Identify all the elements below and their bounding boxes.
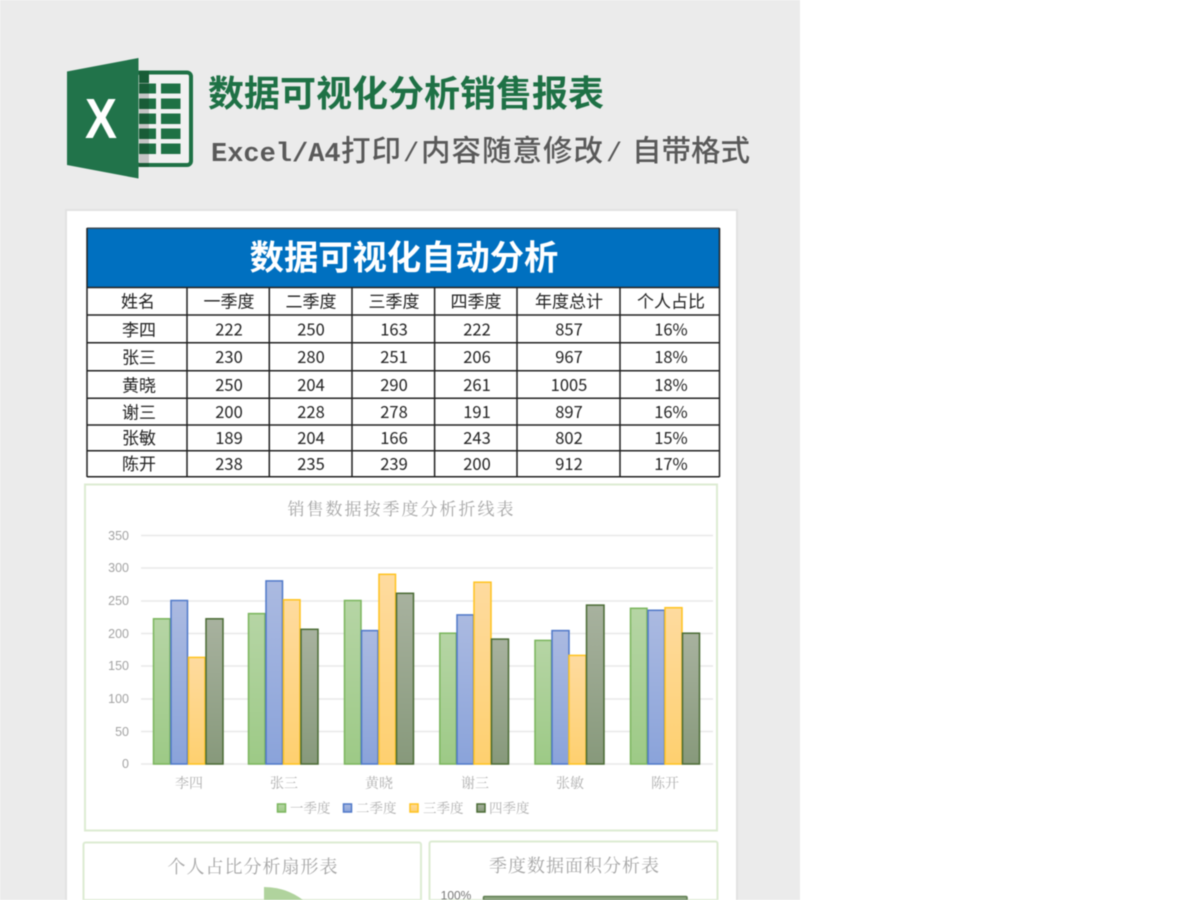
table banner <box>87 228 720 288</box>
sales data table: 228 <box>297 399 325 423</box>
sales data table: 857 <box>555 316 583 340</box>
sales data table: 239 <box>380 451 408 475</box>
sales data table: 200 <box>463 451 491 475</box>
y axis labels: 50 <box>115 725 129 739</box>
sales data table: 290 <box>380 372 408 396</box>
sales data table: 912 <box>555 451 583 475</box>
panel: area chart <box>430 842 718 900</box>
sales data table: 黄晓 <box>122 372 156 396</box>
sales data table: 18% <box>654 344 688 368</box>
sales data table: 李四 <box>122 316 156 341</box>
sales data table: 802 <box>555 425 583 449</box>
chart title: 销售数据按季度分析折线表 <box>288 500 516 519</box>
x axis labels: 张敏 <box>556 773 584 793</box>
subtitle: / <box>403 140 419 170</box>
sales data table: 三季度 <box>368 288 420 312</box>
bars: 李四 <box>154 600 223 764</box>
sales data table: 250 <box>215 372 243 396</box>
legend: 一季度 <box>290 797 331 817</box>
sales data table: 189 <box>215 425 243 449</box>
bars: 黄晓 <box>344 574 414 764</box>
sales data table: 238 <box>215 451 243 475</box>
icon: Excel logo <box>67 58 191 178</box>
legend: 三季度 <box>423 797 464 817</box>
sales data table: 1005 <box>551 372 587 396</box>
sales data table: 204 <box>297 372 325 396</box>
sales data table: 250 <box>297 316 325 340</box>
sales data table: 897 <box>555 399 583 423</box>
legend: 二季度 <box>356 797 397 817</box>
legend: 四季度 <box>489 797 530 817</box>
sales data table: 235 <box>297 451 325 475</box>
x axis labels <box>175 773 679 793</box>
area band <box>484 896 687 900</box>
sales data table: 222 <box>215 316 243 340</box>
pie chart title: 个人占比分析扇形表 <box>168 857 338 877</box>
y axis labels: 200 <box>108 627 129 641</box>
bars: 张三 <box>248 581 318 764</box>
sales data table: 166 <box>380 425 408 449</box>
y axis labels: 250 <box>108 594 129 608</box>
sales data table <box>87 228 720 477</box>
sales data table: 姓名 <box>121 288 155 312</box>
y axis labels: 150 <box>108 659 129 673</box>
x axis labels: 张三 <box>270 773 298 793</box>
sales data table: 200 <box>215 399 243 423</box>
y axis labels <box>108 529 129 771</box>
sales data table: 17% <box>654 451 688 475</box>
sales data table: 222 <box>463 316 491 340</box>
legend <box>278 797 530 817</box>
x axis labels: 李四 <box>175 773 203 793</box>
sales data table: 18% <box>654 372 688 396</box>
sales data table: 陈开 <box>122 450 156 475</box>
subtitle: 自带格式 <box>632 128 750 170</box>
sales data table: 206 <box>463 344 491 368</box>
area chart title: 季度数据面积分析表 <box>489 856 660 876</box>
title: 数据可视化分析销售报表 <box>208 65 604 117</box>
sales data table: 15% <box>654 425 688 449</box>
sales data table: 280 <box>297 344 325 368</box>
x axis labels: 谢三 <box>461 773 489 793</box>
sales data table: 967 <box>555 344 583 368</box>
bars: 陈开 <box>630 608 700 764</box>
table banner: 数据可视化自动分析 <box>250 230 558 280</box>
sales data table: 16% <box>654 316 688 340</box>
panel: bar chart <box>85 484 717 830</box>
sales data table: 243 <box>463 425 491 449</box>
sales data table: 230 <box>215 344 243 368</box>
sales data table: 278 <box>380 399 408 423</box>
x axis labels: 黄晓 <box>365 773 393 793</box>
subtitle: / <box>606 140 622 170</box>
sales data table: 个人占比 <box>637 288 705 312</box>
panel: pie chart <box>84 842 421 900</box>
y axis labels: 300 <box>108 561 129 575</box>
sales data table: 张敏 <box>122 424 156 449</box>
sales data table: 张三 <box>122 344 156 368</box>
subtitle: 打印 <box>341 128 402 170</box>
sales data table: 191 <box>463 399 491 423</box>
panel: white sheet <box>65 209 738 900</box>
sales data table: 一季度 <box>204 288 254 312</box>
y axis labels: 100 <box>108 692 129 706</box>
sales data table: 261 <box>463 372 491 396</box>
subtitle: 内容随意修改 <box>421 128 604 170</box>
pie slice <box>264 887 303 900</box>
background panel <box>0 0 800 900</box>
sales data table: 二季度 <box>286 288 336 312</box>
sales data table: 四季度 <box>450 288 502 312</box>
subtitle: Excel/A4 <box>211 140 341 170</box>
sales data table: 16% <box>654 399 688 423</box>
icon: Excel logo: X <box>85 87 117 151</box>
sales data table: 204 <box>297 425 325 449</box>
y axis labels: 0 <box>122 757 129 771</box>
x axis labels: 陈开 <box>651 773 679 793</box>
bars: 谢三 <box>440 582 508 764</box>
sales data table: 251 <box>380 344 408 368</box>
y axis labels: 350 <box>108 529 129 543</box>
sales data table: 163 <box>380 316 408 340</box>
bars: 张敏 <box>535 605 604 764</box>
sales data table: 年度总计 <box>535 288 603 312</box>
sales data table: 谢三 <box>122 398 156 424</box>
